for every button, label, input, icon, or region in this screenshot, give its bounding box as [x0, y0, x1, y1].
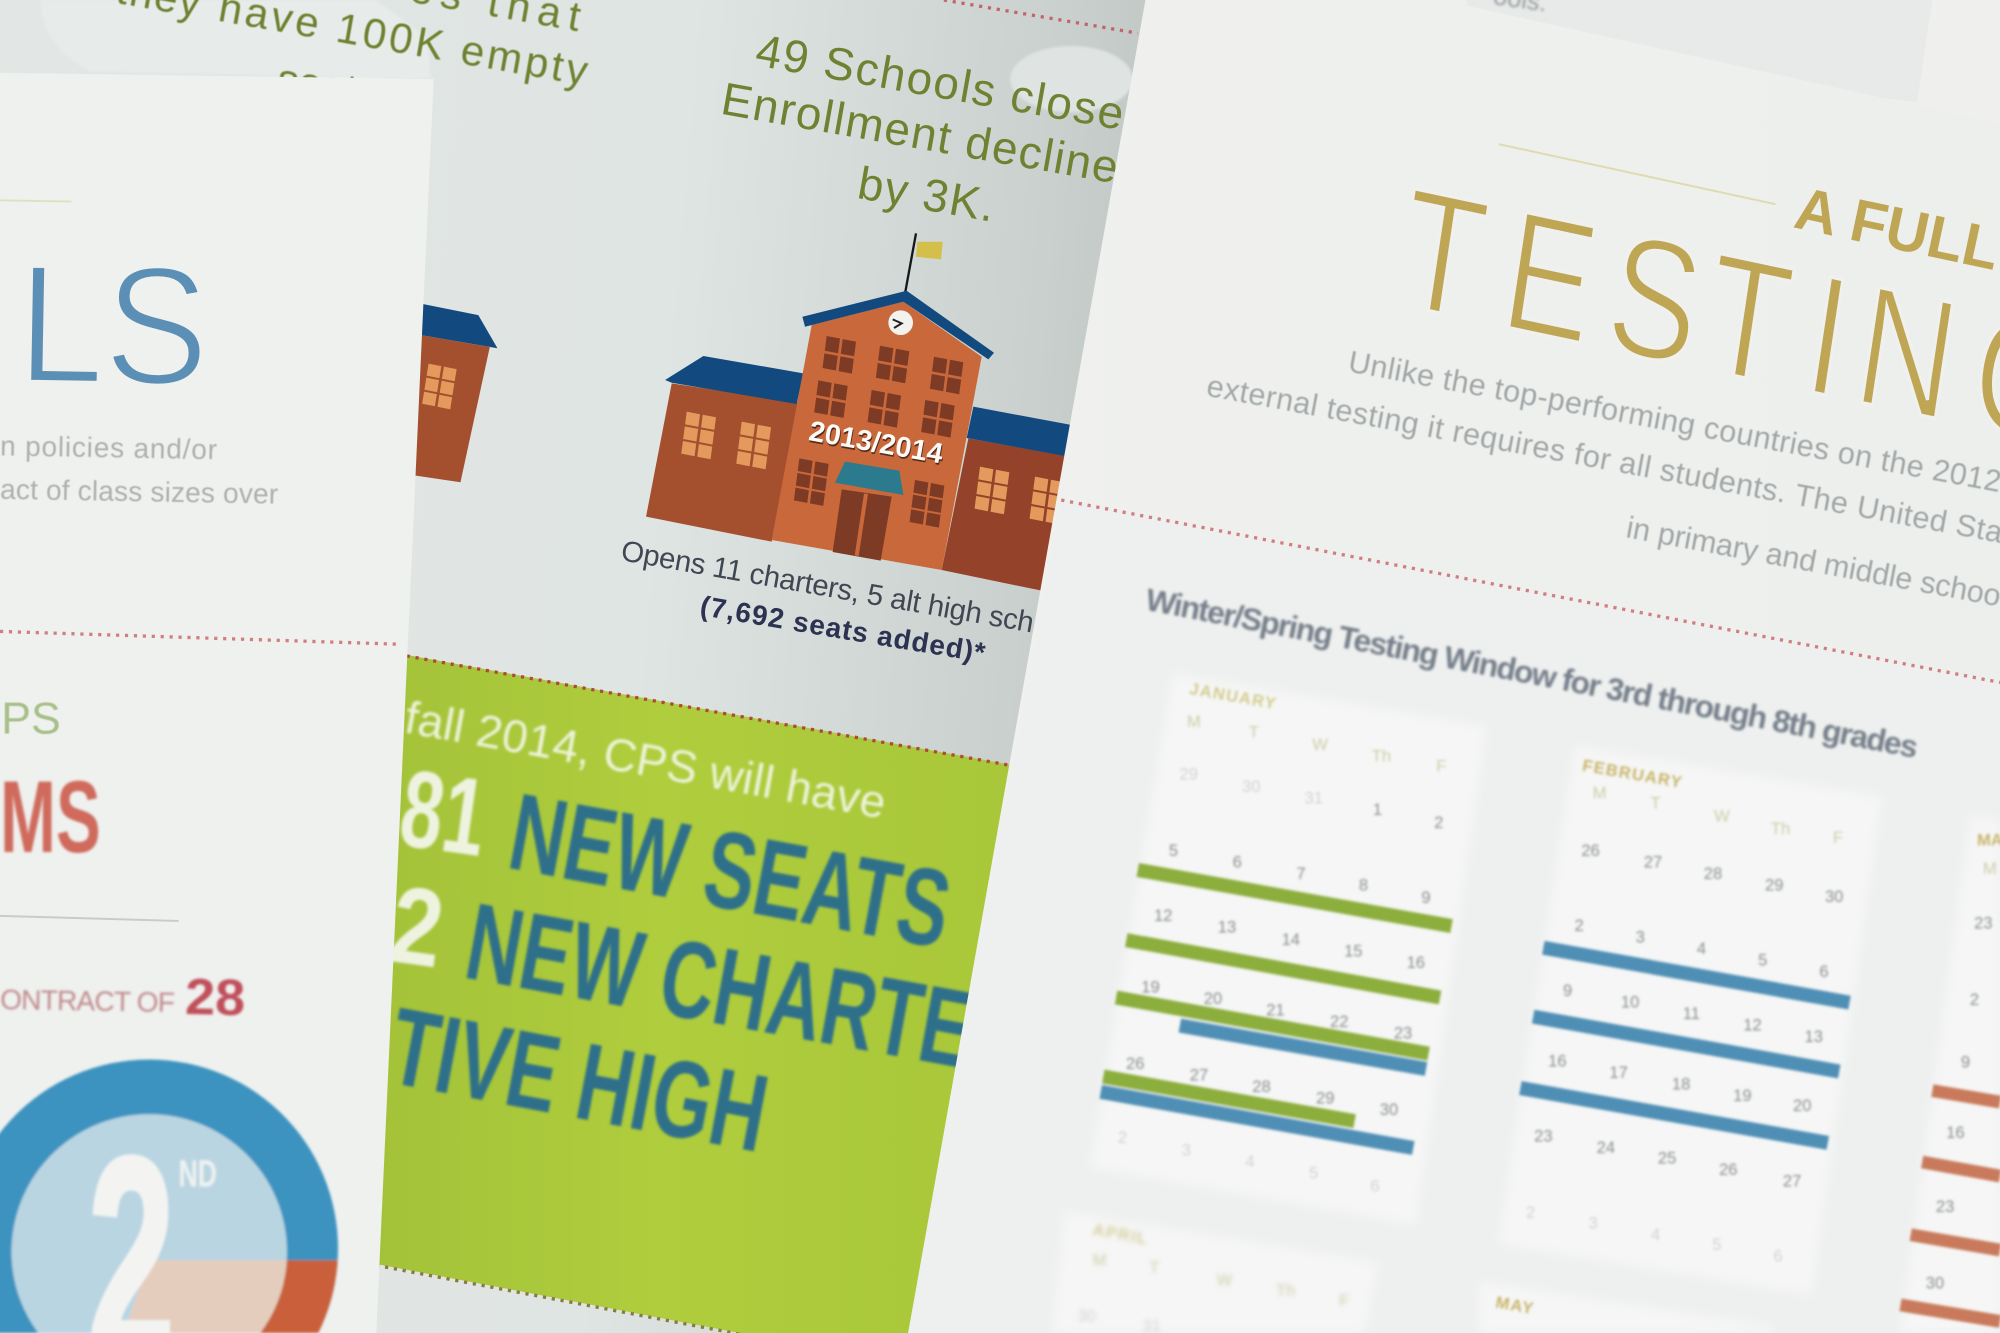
calendar: january: 28: [1252, 1077, 1271, 1096]
paragraph fragment: act of class sizes over: [0, 474, 278, 510]
calendar: january: 22: [1330, 1012, 1349, 1031]
calendar: january: 12: [1154, 906, 1172, 925]
calendar: february: 3: [1588, 1213, 1598, 1232]
calendar: january: 6: [1370, 1176, 1380, 1195]
calendar: january: M: [1187, 712, 1201, 731]
calendar: march partial: 30: [1926, 1273, 1944, 1292]
calendar: may partial: MAY: [1494, 1293, 1536, 1318]
calendar: january: 29: [1180, 764, 1198, 783]
calendar: february: 27: [1644, 852, 1662, 871]
calendar: february: T: [1651, 794, 1661, 813]
calendar: february: 26: [1581, 841, 1600, 860]
calendar: february: 19: [1733, 1086, 1752, 1105]
january test bars: [1101, 870, 1452, 1148]
icon: school building 2013/2014: 2013/2014: [806, 415, 946, 470]
calendar: february: 2: [1574, 916, 1584, 935]
subheading fragment: CPS: PS: [1, 694, 61, 743]
calendar: april partial: 30: [1078, 1306, 1096, 1325]
calendar: february: 29: [1765, 875, 1783, 894]
panel: green fall 2014 summary: [370, 651, 1035, 1333]
calendar: february: 23: [1534, 1127, 1553, 1146]
february test bars: [1520, 948, 1849, 1143]
calendar: february: 5: [1712, 1235, 1721, 1254]
calendar: february: [1520, 756, 1849, 1266]
calendar: february: 9: [1563, 981, 1572, 1000]
calendar: january: 30: [1242, 777, 1261, 796]
paragraph fragment: n policies and/or: [0, 430, 217, 465]
decorative cloud: [41, 0, 431, 79]
calendar: january: T: [1249, 722, 1259, 741]
calendar: january: 14: [1282, 930, 1300, 949]
panel: right testing page: [908, 0, 2000, 1333]
calendar: april partial: F: [1339, 1291, 1349, 1310]
calendar: january: Th: [1372, 747, 1391, 766]
calendar: march partial: 23: [1974, 914, 1993, 933]
contract of 28: [0, 968, 246, 1026]
march test bars: [1901, 1091, 2000, 1321]
calendar: january: 2: [1434, 813, 1443, 832]
calendar: january: 19: [1141, 977, 1160, 996]
calendar title: Winter/Spring Testing Window for 3rd through 8th grades: [1143, 581, 1921, 765]
contract of 28: 28: [185, 968, 246, 1026]
icon: small school building at left: [408, 304, 497, 482]
calendar: january: 26: [1126, 1054, 1144, 1073]
calendar: january: 13: [1218, 917, 1236, 936]
calendar: february: 6: [1819, 962, 1829, 981]
calendar: march partial: 9: [1961, 1053, 1970, 1072]
heading: 49 schools closed: by 3K.: [854, 156, 999, 232]
panel: green fall 2014 summary: 2: [383, 863, 451, 991]
calendar: january: 3: [1182, 1141, 1191, 1160]
calendar: march partial: [1901, 831, 2000, 1321]
calendar: january: 2: [1118, 1128, 1127, 1147]
calendar: march partial: M: [1983, 859, 1997, 878]
panel: middle school closures page: [0, 0, 1148, 1333]
calendar: february: 26: [1719, 1160, 1738, 1179]
calendar: january: JANUARY: [1188, 679, 1278, 713]
panel: left class-size page: [0, 73, 434, 1333]
calendar: february: F: [1833, 828, 1843, 847]
icon: school building 2013/2014: 2013/2014: [807, 417, 946, 472]
intro paragraph: [1204, 345, 2000, 613]
calendar: february: 17: [1609, 1063, 1628, 1082]
intro paragraph: external testing it requires for all students. The United Sta: [1204, 369, 2000, 550]
calendar: january: 21: [1266, 1000, 1285, 1019]
calendar: february: 12: [1743, 1016, 1762, 1035]
caption: opens charters: (7,692 seats added)*: [698, 590, 987, 668]
calendar: february: 3: [1636, 928, 1645, 947]
panel: green fall 2014 summary: 81: [393, 747, 494, 880]
calendar: february: 28: [1704, 864, 1722, 883]
chart: circle 2nd: ND: [179, 1152, 217, 1195]
calendar: january: 30: [1380, 1100, 1398, 1119]
calendar: february: 27: [1783, 1171, 1801, 1190]
calendar: january: 5: [1169, 841, 1178, 860]
calendar: march partial: 23: [1936, 1197, 1954, 1216]
intro paragraph: Unlike the top-performing countries on the 2012: [1346, 345, 2000, 499]
calendar: april partial: Th: [1276, 1281, 1295, 1300]
calendar: january: 29: [1316, 1088, 1334, 1107]
calendar: april partial: [1078, 1220, 1349, 1333]
heading fragment: MS: MS: [0, 760, 101, 874]
heading fragment: LS: LS: [16, 229, 211, 421]
calendar: march partial: 2: [1970, 990, 1979, 1009]
intro paragraph: in primary and middle schoo: [1624, 510, 2000, 613]
calendar: january: 7: [1296, 864, 1306, 883]
dotted rule top: [944, 0, 1138, 33]
calendar: january: 1: [1373, 800, 1382, 819]
top-left olive text: seats.: [274, 54, 392, 118]
paragraph fragment: [0, 430, 278, 510]
caption: opens charters: Opens 11 charters, 5 alt high sch: [619, 534, 1036, 640]
calendar: february: 25: [1658, 1148, 1676, 1167]
panel: green fall 2014 summary: NEW SEATS: [501, 771, 959, 972]
chart: circle 2nd: [0, 1059, 338, 1333]
heading: 49 schools closed: 49 Schools close: [752, 24, 1128, 140]
calendar: february: Th: [1771, 819, 1790, 838]
panel: green fall 2014 summary: TIVE HIGH: [381, 985, 777, 1176]
contract of 28: ONTRACT OF: [0, 984, 175, 1018]
calendar: january: [1101, 679, 1452, 1195]
calendar: february: 4: [1697, 939, 1706, 958]
calendar panel backgrounds: [1052, 674, 2000, 1333]
calendar: february: 24: [1597, 1138, 1615, 1157]
calendar: february: 5: [1758, 951, 1767, 970]
calendar: january: 6: [1233, 852, 1242, 871]
calendar: january: 20: [1204, 989, 1222, 1008]
calendar: february: FEBRUARY: [1581, 756, 1684, 792]
calendar: january: 27: [1190, 1065, 1208, 1084]
calendar: january: 16: [1407, 953, 1425, 972]
calendar: february: 11: [1683, 1004, 1700, 1023]
calendar: april partial: T: [1149, 1258, 1159, 1277]
calendar: january: 5: [1309, 1164, 1318, 1183]
calendar: february: W: [1714, 806, 1730, 825]
calendar: january: 9: [1421, 888, 1431, 907]
calendar: march partial: 16: [1946, 1123, 1965, 1142]
calendar: february: 20: [1793, 1096, 1812, 1115]
calendar: april partial: W: [1217, 1271, 1233, 1290]
calendar: february: 16: [1548, 1051, 1567, 1070]
calendar: february: 4: [1651, 1225, 1660, 1244]
calendar: january: 31: [1305, 789, 1323, 808]
calendar: january: W: [1312, 735, 1328, 754]
panel: green fall 2014 summary: fall 2014, CPS will have: [401, 691, 890, 828]
calendar: january: 23: [1394, 1023, 1412, 1042]
calendar: january: 8: [1359, 875, 1368, 894]
calendar: february: 2: [1526, 1203, 1535, 1222]
calendar: april partial: M: [1093, 1250, 1106, 1269]
icon: school building 2013/2014: [646, 233, 1072, 591]
top-left olive text: [113, 0, 591, 118]
calendar: april partial: APRIL: [1091, 1220, 1150, 1248]
panel: green fall 2014 summary: NEW CHARTER: [457, 881, 1035, 1102]
calendar: february: 6: [1773, 1247, 1783, 1266]
calendar: february: 10: [1621, 993, 1639, 1012]
calendar: february: 18: [1672, 1074, 1690, 1093]
calendar: january: 4: [1245, 1152, 1255, 1171]
calendar: january: F: [1436, 757, 1446, 776]
heading: 49 schools closed: [718, 24, 1128, 232]
calendar: february: 30: [1825, 887, 1843, 906]
calendar: january: 15: [1344, 942, 1363, 961]
calendar: february: 13: [1805, 1027, 1823, 1046]
calendar: february: M: [1593, 784, 1606, 803]
heading: 49 schools closed: Enrollment decline: [718, 72, 1122, 193]
